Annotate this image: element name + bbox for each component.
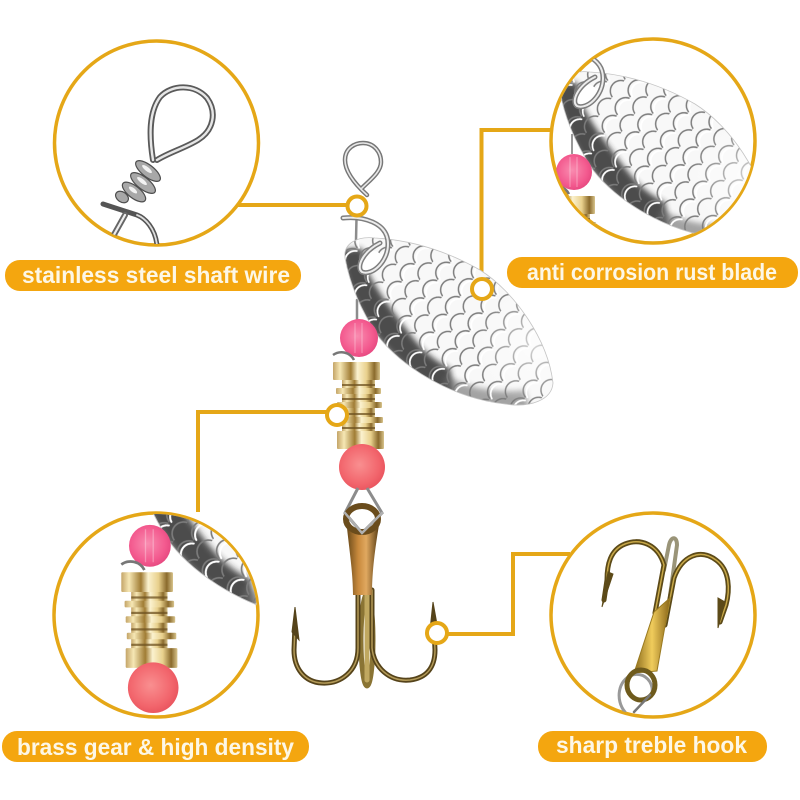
wire loop [345, 488, 382, 533]
inset circle [54, 41, 258, 245]
spinner blade [330, 225, 570, 420]
node: blade [472, 279, 492, 299]
main spinner lure [292, 143, 570, 686]
brass gear body [333, 352, 384, 449]
red bead [339, 444, 385, 490]
zoomed blade [556, 58, 751, 234]
panel: sharp treble hook [551, 513, 755, 717]
node: shaft wire [348, 196, 366, 216]
treble hook [292, 506, 438, 686]
label pill: gear: brass gear & high density [17, 734, 294, 760]
swivel eye [345, 143, 381, 322]
callout line: treble hook [448, 554, 570, 634]
label pill: shaft wire: stainless steel shaft wire [22, 262, 290, 288]
zoomed gear and beads [120, 514, 256, 713]
callout line: shaft wire [238, 203, 347, 207]
panel: anti corrosion rust blade [549, 37, 757, 245]
label pill: hook: sharp treble hook [556, 732, 747, 758]
panel: stainless steel shaft wire [54, 41, 258, 245]
snap swivel [103, 87, 213, 245]
callout line: brass gear [198, 412, 327, 512]
node: hook [427, 623, 447, 643]
label pill: blade: anti corrosion rust blade [527, 259, 777, 285]
node: gear [327, 405, 347, 425]
split ring [343, 218, 388, 273]
panel: brass gear [52, 511, 260, 719]
pink bead [340, 319, 378, 357]
inset circle [551, 39, 755, 243]
callout line: blade [482, 130, 552, 280]
inset circle [54, 513, 258, 717]
zoomed hook [602, 538, 728, 712]
inset circle [551, 513, 755, 717]
